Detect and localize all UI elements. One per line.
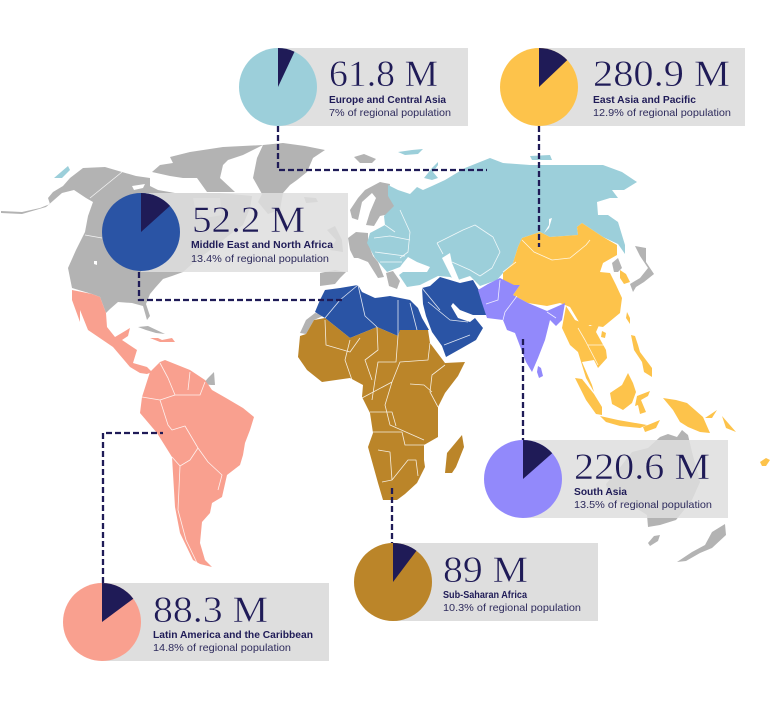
callout: East Asia and Pacific: [500, 48, 745, 126]
map: country borders: [85, 172, 605, 565]
map: Sub-Saharan Africa region: [298, 318, 465, 500]
pie: East Asia and Pacific 12.9%: [500, 48, 578, 126]
region name: South Asia: [574, 486, 627, 498]
figure: 280.9 M: [593, 54, 730, 95]
world map: [1, 143, 770, 567]
share: 13.4% of regional population: [191, 253, 329, 265]
share: 10.3% of regional population: [443, 602, 581, 614]
callout: Europe and Central Asia: [239, 48, 468, 126]
share: 7% of regional population: [329, 107, 451, 119]
region name: Europe and Central Asia: [329, 94, 446, 106]
pie: Middle East and North Africa 13.4%: [102, 193, 180, 271]
callout: Middle East and North Africa: [102, 193, 348, 272]
figure: 52.2 M: [192, 200, 305, 241]
pie: South Asia 13.5%: [484, 440, 562, 518]
connector lines: [103, 126, 539, 583]
callout: South Asia: [484, 440, 728, 518]
share: 13.5% of regional population: [574, 499, 712, 511]
region name: East Asia and Pacific: [593, 94, 696, 106]
pie: Sub-Saharan Africa 10.3%: [354, 543, 432, 621]
map: East Asia and Pacific region: [503, 223, 770, 466]
share: 12.9% of regional population: [593, 107, 731, 119]
map: Middle East and North Africa region: [315, 277, 488, 357]
callout: Latin America and the Caribbean: [63, 583, 329, 661]
figure: 220.6 M: [574, 447, 710, 488]
figure: 88.3 M: [153, 590, 268, 631]
pie: Europe and Central Asia 7%: [239, 48, 317, 126]
pie: Latin America and the Caribbean 14.8%: [63, 583, 141, 661]
callout: Sub-Saharan Africa: [354, 543, 598, 621]
region name: Middle East and North Africa: [191, 239, 333, 251]
region name: Sub-Saharan Africa: [443, 589, 527, 601]
share: 14.8% of regional population: [153, 642, 291, 654]
map: Latin America and the Caribbean region: [72, 290, 254, 567]
map: unclassified countries: [1, 143, 726, 562]
figure: 61.8 M: [329, 54, 438, 95]
map: South Asia region: [478, 278, 565, 378]
figure: 89 M: [443, 550, 528, 591]
region name: Latin America and the Caribbean: [153, 629, 313, 641]
map: Europe and Central Asia region: [54, 149, 637, 287]
